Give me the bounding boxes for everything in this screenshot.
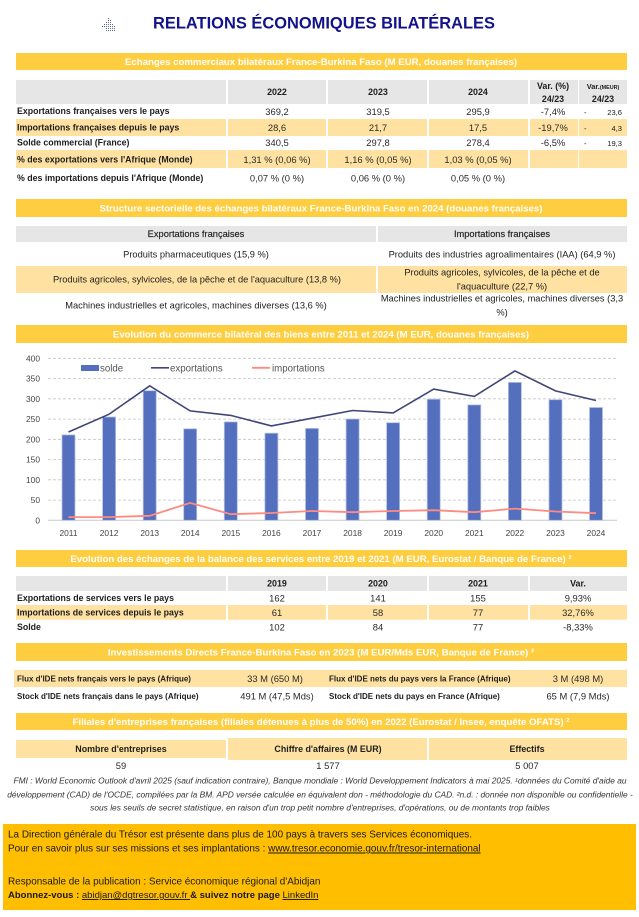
x axis labels: 2016 — [262, 528, 281, 538]
row: importations: 17,5 — [469, 122, 487, 133]
table header row: 24/23 — [592, 94, 614, 104]
x axis labels: 2015 — [221, 528, 240, 538]
legend: exportations — [170, 364, 223, 374]
x axis labels: 2019 — [384, 528, 403, 538]
x axis labels — [59, 528, 606, 538]
table header row: 2022 — [267, 87, 287, 97]
row: importations de services: 61 — [272, 607, 282, 618]
row: importations de services: 77 — [473, 607, 483, 618]
column headers — [16, 226, 627, 242]
table header row: 2021 — [468, 578, 488, 588]
heading: investissements directs: Investissements Directs France-Burkina Faso en 2023 (M EUR/Mds EUR, Banque de France) ² — [108, 648, 534, 658]
row: part des importations: 0,07 % (0 %) — [250, 172, 304, 184]
heading: balance des services — [16, 550, 627, 567]
y axis labels: 150 — [26, 455, 40, 465]
x axis labels: 2012 — [100, 528, 119, 538]
row: importations: Importations françaises depuis le pays — [17, 122, 179, 132]
row: solde services: 77 — [473, 622, 483, 632]
row: flux IDE: Flux d'IDE nets français vers le pays (Afrique) — [17, 674, 191, 684]
row: exportations de services — [17, 592, 591, 604]
x axis labels: 2021 — [465, 528, 484, 538]
row: part des exportations: 1,16 % (0,05 %) — [344, 154, 412, 165]
row: solde services: 84 — [373, 622, 383, 632]
panel: filiales table — [16, 738, 627, 771]
row: produits pharmaceutiques — [123, 250, 615, 260]
row: importations de services: Importations de services depuis le pays — [17, 608, 184, 618]
cell: chiffre d'affaires — [228, 738, 427, 771]
row: flux IDE: 33 M (650 M) — [247, 673, 303, 684]
footnote — [7, 776, 633, 812]
row: importations: 21,7 — [369, 122, 387, 133]
table header row: Var.(MEUR) — [587, 82, 620, 91]
y axis labels — [26, 353, 40, 525]
row: stock IDE — [17, 690, 610, 702]
cell: nombre d'entreprises: 59 — [116, 760, 126, 771]
text: présence du Trésor — [8, 830, 481, 854]
y axis labels: 250 — [26, 414, 40, 424]
row: exportations: - — [584, 108, 587, 117]
x axis labels: 2017 — [303, 528, 322, 538]
row: exportations de services: 141 — [370, 592, 386, 604]
y axis labels: 300 — [26, 394, 40, 404]
row: machines — [65, 294, 623, 318]
panel: services table — [16, 576, 627, 632]
text: présence du Trésor: Pour en savoir plus sur ses missions et ses implantations : www.tresor.economie.gouv.fr/tresor-international — [8, 844, 481, 854]
row: stock IDE: Stock d'IDE nets français dans le pays (Afrique) — [17, 692, 199, 701]
bars: solde — [62, 382, 602, 520]
x axis labels: 2020 — [424, 528, 443, 538]
row: solde commercial: 340,5 — [265, 137, 289, 148]
row: solde commercial: 19,3 — [607, 139, 622, 148]
footnote: sous les seuils de secret statistique, en raison d'un trop petit nombre d'entreprises, d'opérations, ou de montants trop faibles — [90, 802, 551, 812]
row: solde commercial: 278,4 — [466, 137, 490, 148]
text: responsable et abonnement: Responsable de la publication : Service économique régional d'Abidjan — [8, 876, 320, 888]
table header row — [16, 80, 627, 104]
heading: évolution du commerce: Evolution du commerce bilatéral des biens entre 2011 et 2024 (M EUR, douanes françaises) — [113, 330, 529, 340]
cell: effectifs: 5 007 — [515, 760, 539, 771]
row: machines: %) — [496, 308, 508, 318]
row: part des importations: 0,06 % (0 %) — [351, 172, 405, 184]
table header row: Var. — [570, 578, 586, 588]
row: flux IDE: Flux d'IDE nets du pays vers la France (Afrique) — [329, 674, 511, 684]
row: stock IDE: Stock d'IDE nets du pays en France (Afrique) — [329, 692, 500, 701]
y axis labels: 350 — [26, 374, 40, 384]
row: machines: Machines industrielles et agricoles, machines diverses (3,3 — [381, 294, 623, 304]
table header row: 2024 — [468, 87, 488, 97]
row: importations — [16, 119, 627, 136]
row: solde commercial: Solde commercial (France) — [17, 138, 130, 148]
x axis labels: 2018 — [343, 528, 362, 538]
row: importations de services: 32,76% — [562, 607, 594, 618]
heading: structure sectorielle: Structure sectorielle des échanges bilatéraux France-Burkina Faso en 2024 (douanes françaises) — [100, 204, 542, 214]
cell: chiffre d'affaires: 1 577 — [316, 760, 340, 771]
column headers: Exportations françaises — [148, 229, 245, 239]
table header row: 2020 — [368, 578, 388, 588]
cell: nombre d'entreprises: Nombre d'entreprises — [75, 744, 167, 754]
title: RELATIONS ÉCONOMIQUES BILATÉRALES — [153, 14, 495, 32]
cell: effectifs: Effectifs — [509, 744, 545, 754]
table header row: 2019 — [267, 578, 287, 588]
row: part des importations — [17, 172, 505, 184]
row: part des exportations: 1,03 % (0,05 %) — [444, 154, 512, 165]
y axis labels: 200 — [26, 434, 40, 444]
heading: filiales — [16, 713, 627, 730]
row: produits agricoles — [16, 266, 627, 293]
table header row: 2023 — [368, 87, 388, 97]
row: produits agricoles: l'aquaculture (22,7 %) — [457, 282, 547, 292]
row: solde services: Solde — [17, 622, 41, 632]
panel: IDE — [14, 670, 627, 702]
row: exportations: 295,9 — [466, 106, 490, 117]
row: importations: -19,7% — [538, 122, 568, 133]
row: part des importations: % des importations depuis l'Afrique (Monde) — [17, 173, 203, 183]
row: solde commercial: - — [584, 139, 587, 148]
row: importations de services — [16, 605, 627, 620]
legend — [81, 364, 325, 374]
row: solde commercial: 297,8 — [366, 137, 390, 148]
heading: échanges commerciaux: Echanges commerciaux bilatéraux France-Burkina Faso (M EUR, douanes françaises) — [125, 57, 517, 68]
x axis labels: 2013 — [140, 528, 159, 538]
row: solde services — [17, 622, 593, 632]
text: responsable et abonnement: Abonnez-vous : abidjan@dgtresor.gouv.fr & suivez notre page LinkedIn — [8, 890, 318, 901]
x axis labels: 2011 — [59, 528, 78, 538]
legend: importations — [272, 364, 325, 374]
row: part des exportations: % des exportations vers l'Afrique (Monde) — [17, 154, 193, 164]
heading: échanges commerciaux — [16, 53, 627, 70]
cell: nombre d'entreprises — [16, 740, 226, 771]
table header row — [16, 576, 627, 591]
row: solde services: -8,33% — [563, 622, 593, 632]
cell: effectifs — [429, 738, 627, 771]
row: importations: 28,6 — [268, 122, 286, 133]
footnote: FMI : World Economic Outlook d'avril 2025 (sauf indication contraire), Banque mondiale : World Developpement Indicators à mai 2025. ¹données du Comité d'aide au — [13, 776, 627, 786]
heading: balance des services: Evolution des échanges de la balance des services entre 2019 et 2021 (M EUR, Eurostat / Banque de France) ² — [70, 554, 572, 565]
line: exportations — [68, 371, 596, 432]
row: part des exportations: 1,31 % (0,06 %) — [243, 154, 311, 165]
row: solde commercial: -6,5% — [541, 137, 565, 148]
x axis labels: 2014 — [181, 528, 200, 538]
row: solde commercial — [17, 137, 622, 148]
row: importations: - — [584, 124, 587, 133]
row: exportations: -7,4% — [541, 106, 565, 117]
row: exportations: 23,6 — [607, 108, 622, 117]
heading: structure sectorielle — [16, 199, 627, 217]
x axis labels: 2023 — [546, 528, 565, 538]
y axis labels: 0 — [35, 515, 40, 525]
row: exportations de services: Exportations de services vers le pays — [17, 593, 174, 603]
row: part des exportations — [16, 150, 627, 168]
row: produits agricoles: Produits agricoles, sylvicoles, de la pêche et de l'aquaculture (13,8 %) — [53, 274, 341, 284]
row: exportations de services: 9,93% — [565, 592, 591, 604]
row: produits agricoles: Produits agricoles, sylvicoles, de la pêche et de — [404, 268, 600, 278]
row: exportations: Exportations françaises vers le pays — [17, 106, 170, 116]
row: stock IDE: 491 M (47,5 Mds) — [240, 690, 314, 702]
row: exportations: 319,5 — [366, 106, 390, 117]
row: exportations de services: 162 — [269, 592, 285, 604]
row: machines: Machines industrielles et agricoles, machines diverses (13,6 %) — [65, 300, 327, 310]
y axis labels: 100 — [26, 475, 40, 485]
x axis labels: 2024 — [587, 528, 606, 538]
chart: commerce bilatéral — [26, 353, 617, 538]
x axis labels: 2022 — [506, 528, 525, 538]
panel: contact box — [3, 824, 636, 910]
row: produits pharmaceutiques: Produits des industries agroalimentaires (IAA) (64,9 %) — [389, 250, 615, 260]
legend: solde — [100, 364, 123, 374]
row: solde services: 102 — [269, 622, 285, 632]
row: exportations de services: 155 — [470, 592, 486, 604]
panel: sector table — [16, 226, 627, 318]
row: part des importations: 0,05 % (0 %) — [451, 172, 505, 184]
heading: investissements directs — [16, 643, 627, 661]
heading: filiales: Filiales d'entreprises françaises (filiales détenues à plus de 50%) en 2022 (Eurostat / Insee, enquête OFATS) ² — [73, 717, 569, 728]
row: flux IDE: 3 M (498 M) — [553, 673, 603, 684]
row: stock IDE: 65 M (7,9 Mds) — [546, 690, 610, 702]
cell: chiffre d'affaires: Chiffre d'affaires (M EUR) — [274, 744, 382, 754]
row: importations: 4,3 — [611, 124, 622, 133]
row: exportations: 369,2 — [265, 106, 289, 117]
y axis labels: 400 — [26, 353, 40, 363]
row: importations de services: 58 — [373, 607, 383, 618]
heading: évolution du commerce — [16, 325, 627, 343]
icon: dotted logo — [102, 18, 115, 31]
column headers: Importations françaises — [454, 229, 550, 239]
table header row: 24/23 — [542, 94, 564, 104]
row: flux IDE — [14, 670, 627, 687]
y axis labels: 50 — [31, 495, 40, 505]
footnote: développement (CAD) de l'OCDE, compilées par la BM. APD versée calculée en équivalent don - méthodologie du CAD. ²n.d. : donnée non disponible ou confidentielle - — [7, 790, 633, 800]
line: importations — [68, 503, 596, 517]
text: responsable et abonnement — [8, 876, 320, 901]
table header row: Var. (%) — [537, 81, 569, 91]
row: exportations — [17, 106, 622, 117]
text: présence du Trésor: La Direction générale du Trésor est présente dans plus de 100 pays à travers ses Services économiques. — [8, 830, 472, 840]
panel: trade table — [16, 80, 627, 184]
row: produits pharmaceutiques: Produits pharmaceutiques (15,9 %) — [123, 250, 269, 260]
